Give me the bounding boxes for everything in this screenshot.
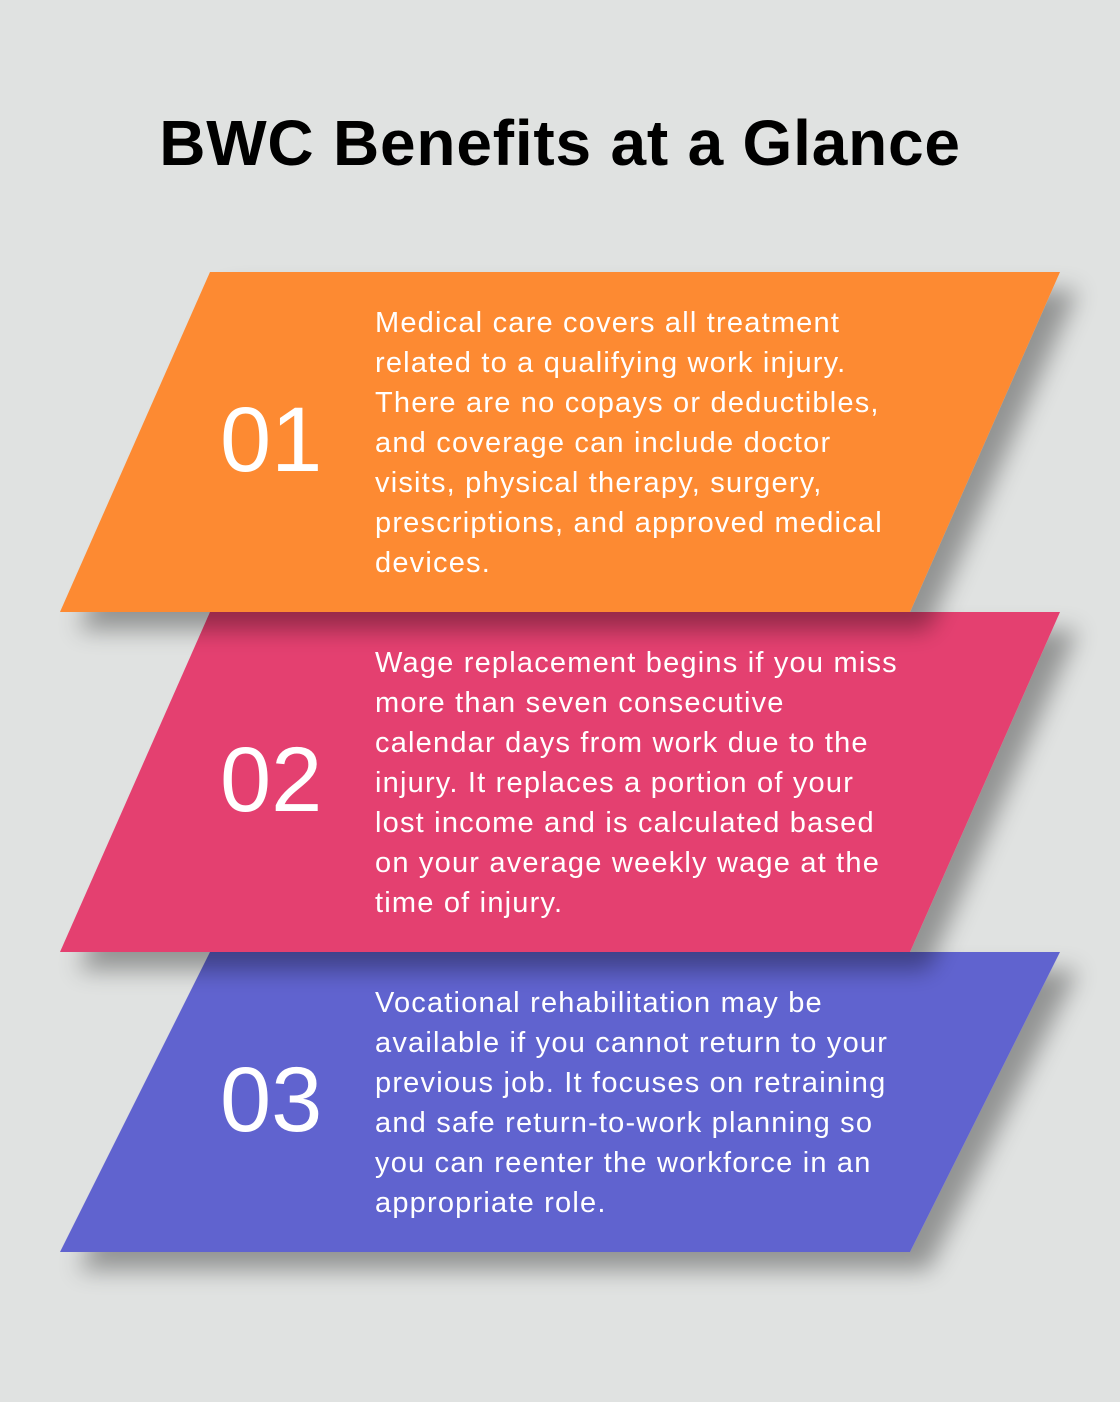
text 01: There are no copays or deductibles, bbox=[375, 387, 880, 419]
text 02: on your average weekly wage at the bbox=[375, 847, 880, 879]
text 01: prescriptions, and approved medical bbox=[375, 507, 883, 539]
text 02: Wage replacement begins if you miss bbox=[375, 647, 898, 679]
text 03: and safe return-to-work planning so bbox=[375, 1107, 873, 1139]
text 01: Medical care covers all treatment bbox=[375, 307, 840, 339]
text 03: you can reenter the workforce in an bbox=[375, 1147, 872, 1179]
text 02: calendar days from work due to the bbox=[375, 727, 869, 759]
text 02: injury. It replaces a portion of your bbox=[375, 767, 854, 799]
text 03: available if you cannot return to your bbox=[375, 1027, 888, 1059]
panel: 03 bbox=[60, 952, 1060, 1252]
text 02 bbox=[375, 647, 898, 919]
title: BWC Benefits at a Glance bbox=[159, 107, 961, 179]
number 02: 02 bbox=[220, 729, 322, 831]
text 01: and coverage can include doctor bbox=[375, 427, 831, 459]
text 02: more than seven consecutive bbox=[375, 687, 785, 719]
number 01: 01 bbox=[220, 389, 322, 491]
panel: 02 bbox=[60, 612, 1060, 952]
text 03: appropriate role. bbox=[375, 1187, 607, 1219]
text 01 bbox=[375, 307, 883, 579]
text 02: lost income and is calculated based bbox=[375, 807, 875, 839]
text 01: devices. bbox=[375, 547, 491, 579]
text 02: time of injury. bbox=[375, 887, 563, 919]
number 03: 03 bbox=[220, 1049, 322, 1151]
text 03: Vocational rehabilitation may be bbox=[375, 987, 823, 1019]
text 03: previous job. It focuses on retraining bbox=[375, 1067, 886, 1099]
text 03 bbox=[375, 987, 888, 1219]
panel: 01 bbox=[60, 272, 1060, 612]
text 01: visits, physical therapy, surgery, bbox=[375, 467, 822, 499]
text 01: related to a qualifying work injury. bbox=[375, 347, 846, 379]
